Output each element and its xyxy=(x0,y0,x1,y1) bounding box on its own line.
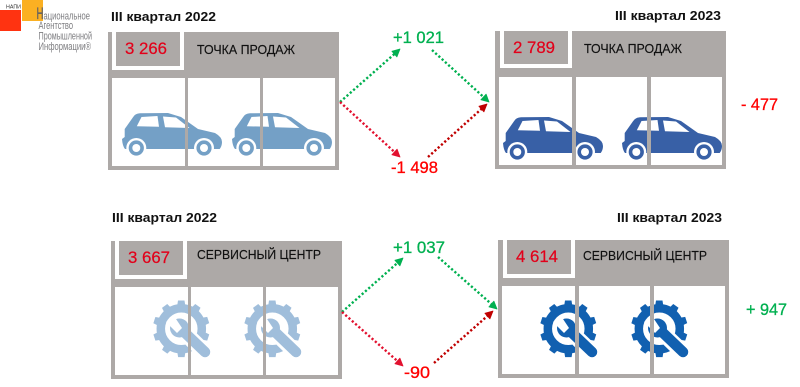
panel: точка продаж 2023 xyxy=(495,31,726,169)
value: 4 614: 4 614 xyxy=(516,248,558,266)
value: 2 789: 2 789 xyxy=(513,39,555,57)
icon: car xyxy=(232,113,332,158)
icon: car xyxy=(122,113,222,158)
logo: НАПИ: Промышленной xyxy=(38,30,92,42)
value: +1 021: +1 021 xyxy=(393,29,444,47)
arrow: dark red up xyxy=(428,104,487,157)
panel: сервисный центр 2023 xyxy=(498,240,729,378)
value: +1 037: +1 037 xyxy=(393,239,445,257)
logo: НАПИ: Агентство xyxy=(38,20,73,32)
panel: сервисный центр 2022 xyxy=(111,241,342,379)
logo: НАПИ: ациональное xyxy=(44,10,90,22)
label: сервисный центр: СЕРВИСНЫЙ ЦЕНТР xyxy=(583,248,707,263)
heading: III квартал 2023, сервисный центр: III квартал 2023 xyxy=(617,210,722,225)
arrow: red down xyxy=(340,102,400,157)
arrows: точка продаж xyxy=(340,49,489,157)
value: -1 498: -1 498 xyxy=(391,159,438,177)
label: сервисный центр: СЕРВИСНЫЙ ЦЕНТР xyxy=(197,247,321,262)
icon: car xyxy=(503,117,603,162)
heading: III квартал 2022, точка продаж: III квартал 2022 xyxy=(111,9,216,24)
arrow: red down xyxy=(342,312,403,366)
logo: НАПИ xyxy=(0,0,92,53)
heading: III квартал 2023, точка продаж: III квартал 2023 xyxy=(615,8,721,23)
heading: III квартал 2022, сервисный центр: III квартал 2022 xyxy=(112,210,217,225)
icon: gear with wrench xyxy=(631,300,688,357)
arrow: dark red up xyxy=(434,311,493,363)
value: 3 266: 3 266 xyxy=(125,40,167,58)
arrow: green up xyxy=(340,49,400,102)
arrows: сервисный центр xyxy=(342,257,497,366)
value: 3 667: 3 667 xyxy=(128,249,170,267)
arrow: green down xyxy=(438,257,497,309)
icon: gear with wrench xyxy=(244,300,301,357)
change: + 947: + 947 xyxy=(746,301,787,319)
logo: НАПИ: НАПИ xyxy=(6,4,21,10)
value: -90: -90 xyxy=(404,364,430,382)
label: точка продаж: ТОЧКА ПРОДАЖ xyxy=(197,43,295,57)
panel: точка продаж 2022 xyxy=(108,32,339,170)
logo: НАПИ: Н xyxy=(36,4,44,23)
icon: gear with wrench xyxy=(540,300,597,357)
label: точка продаж: ТОЧКА ПРОДАЖ xyxy=(584,42,682,56)
icon: car xyxy=(622,117,722,162)
icon: gear with wrench xyxy=(153,300,210,357)
logo: НАПИ: Информации® xyxy=(38,41,91,53)
arrow: green down xyxy=(432,50,489,102)
change: - 477: - 477 xyxy=(741,96,778,114)
arrow: green up xyxy=(342,258,403,312)
